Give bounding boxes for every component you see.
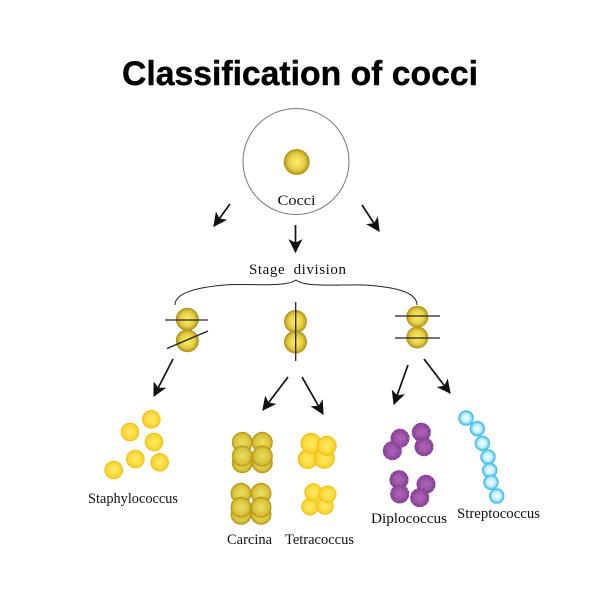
carcina cluster top (232, 432, 273, 473)
carcina cluster bottom (230, 483, 272, 525)
label: Streptococcus: Streptococcus (457, 506, 540, 522)
label: Staphylococcus: Staphylococcus (88, 491, 178, 507)
tetracoccus cluster bottom (301, 483, 337, 516)
arrow: top left (214, 204, 230, 226)
division: center pair (284, 302, 307, 361)
icon: single coccus (284, 149, 310, 175)
label: Cocci: Cocci (278, 193, 316, 209)
tetracoccus cluster top (298, 433, 337, 469)
division: left pair (165, 308, 208, 352)
arrow: to carcina (263, 377, 288, 410)
arrow: top right (362, 205, 379, 231)
label: Tetracoccus: Tetracoccus (285, 532, 354, 548)
streptococcus chain (458, 410, 504, 504)
arrow: to streptococcus (424, 359, 450, 393)
label: Diplococcus: Diplococcus (371, 511, 447, 527)
arrow: top center (294, 225, 296, 252)
arrow: to staphylococcus (154, 359, 173, 396)
arrow: to diplococcus (394, 365, 408, 404)
diplococcus clusters (383, 423, 436, 507)
label: Stage division: Stage division (249, 262, 346, 278)
brace (175, 280, 417, 305)
arrow: to tetracoccus (302, 377, 323, 414)
title: Classification of cocci (122, 55, 478, 93)
cocci circle (243, 108, 349, 214)
label: Carcina: Carcina (227, 532, 272, 548)
division: right pair (395, 306, 440, 348)
staphylococcus cluster (104, 410, 169, 479)
